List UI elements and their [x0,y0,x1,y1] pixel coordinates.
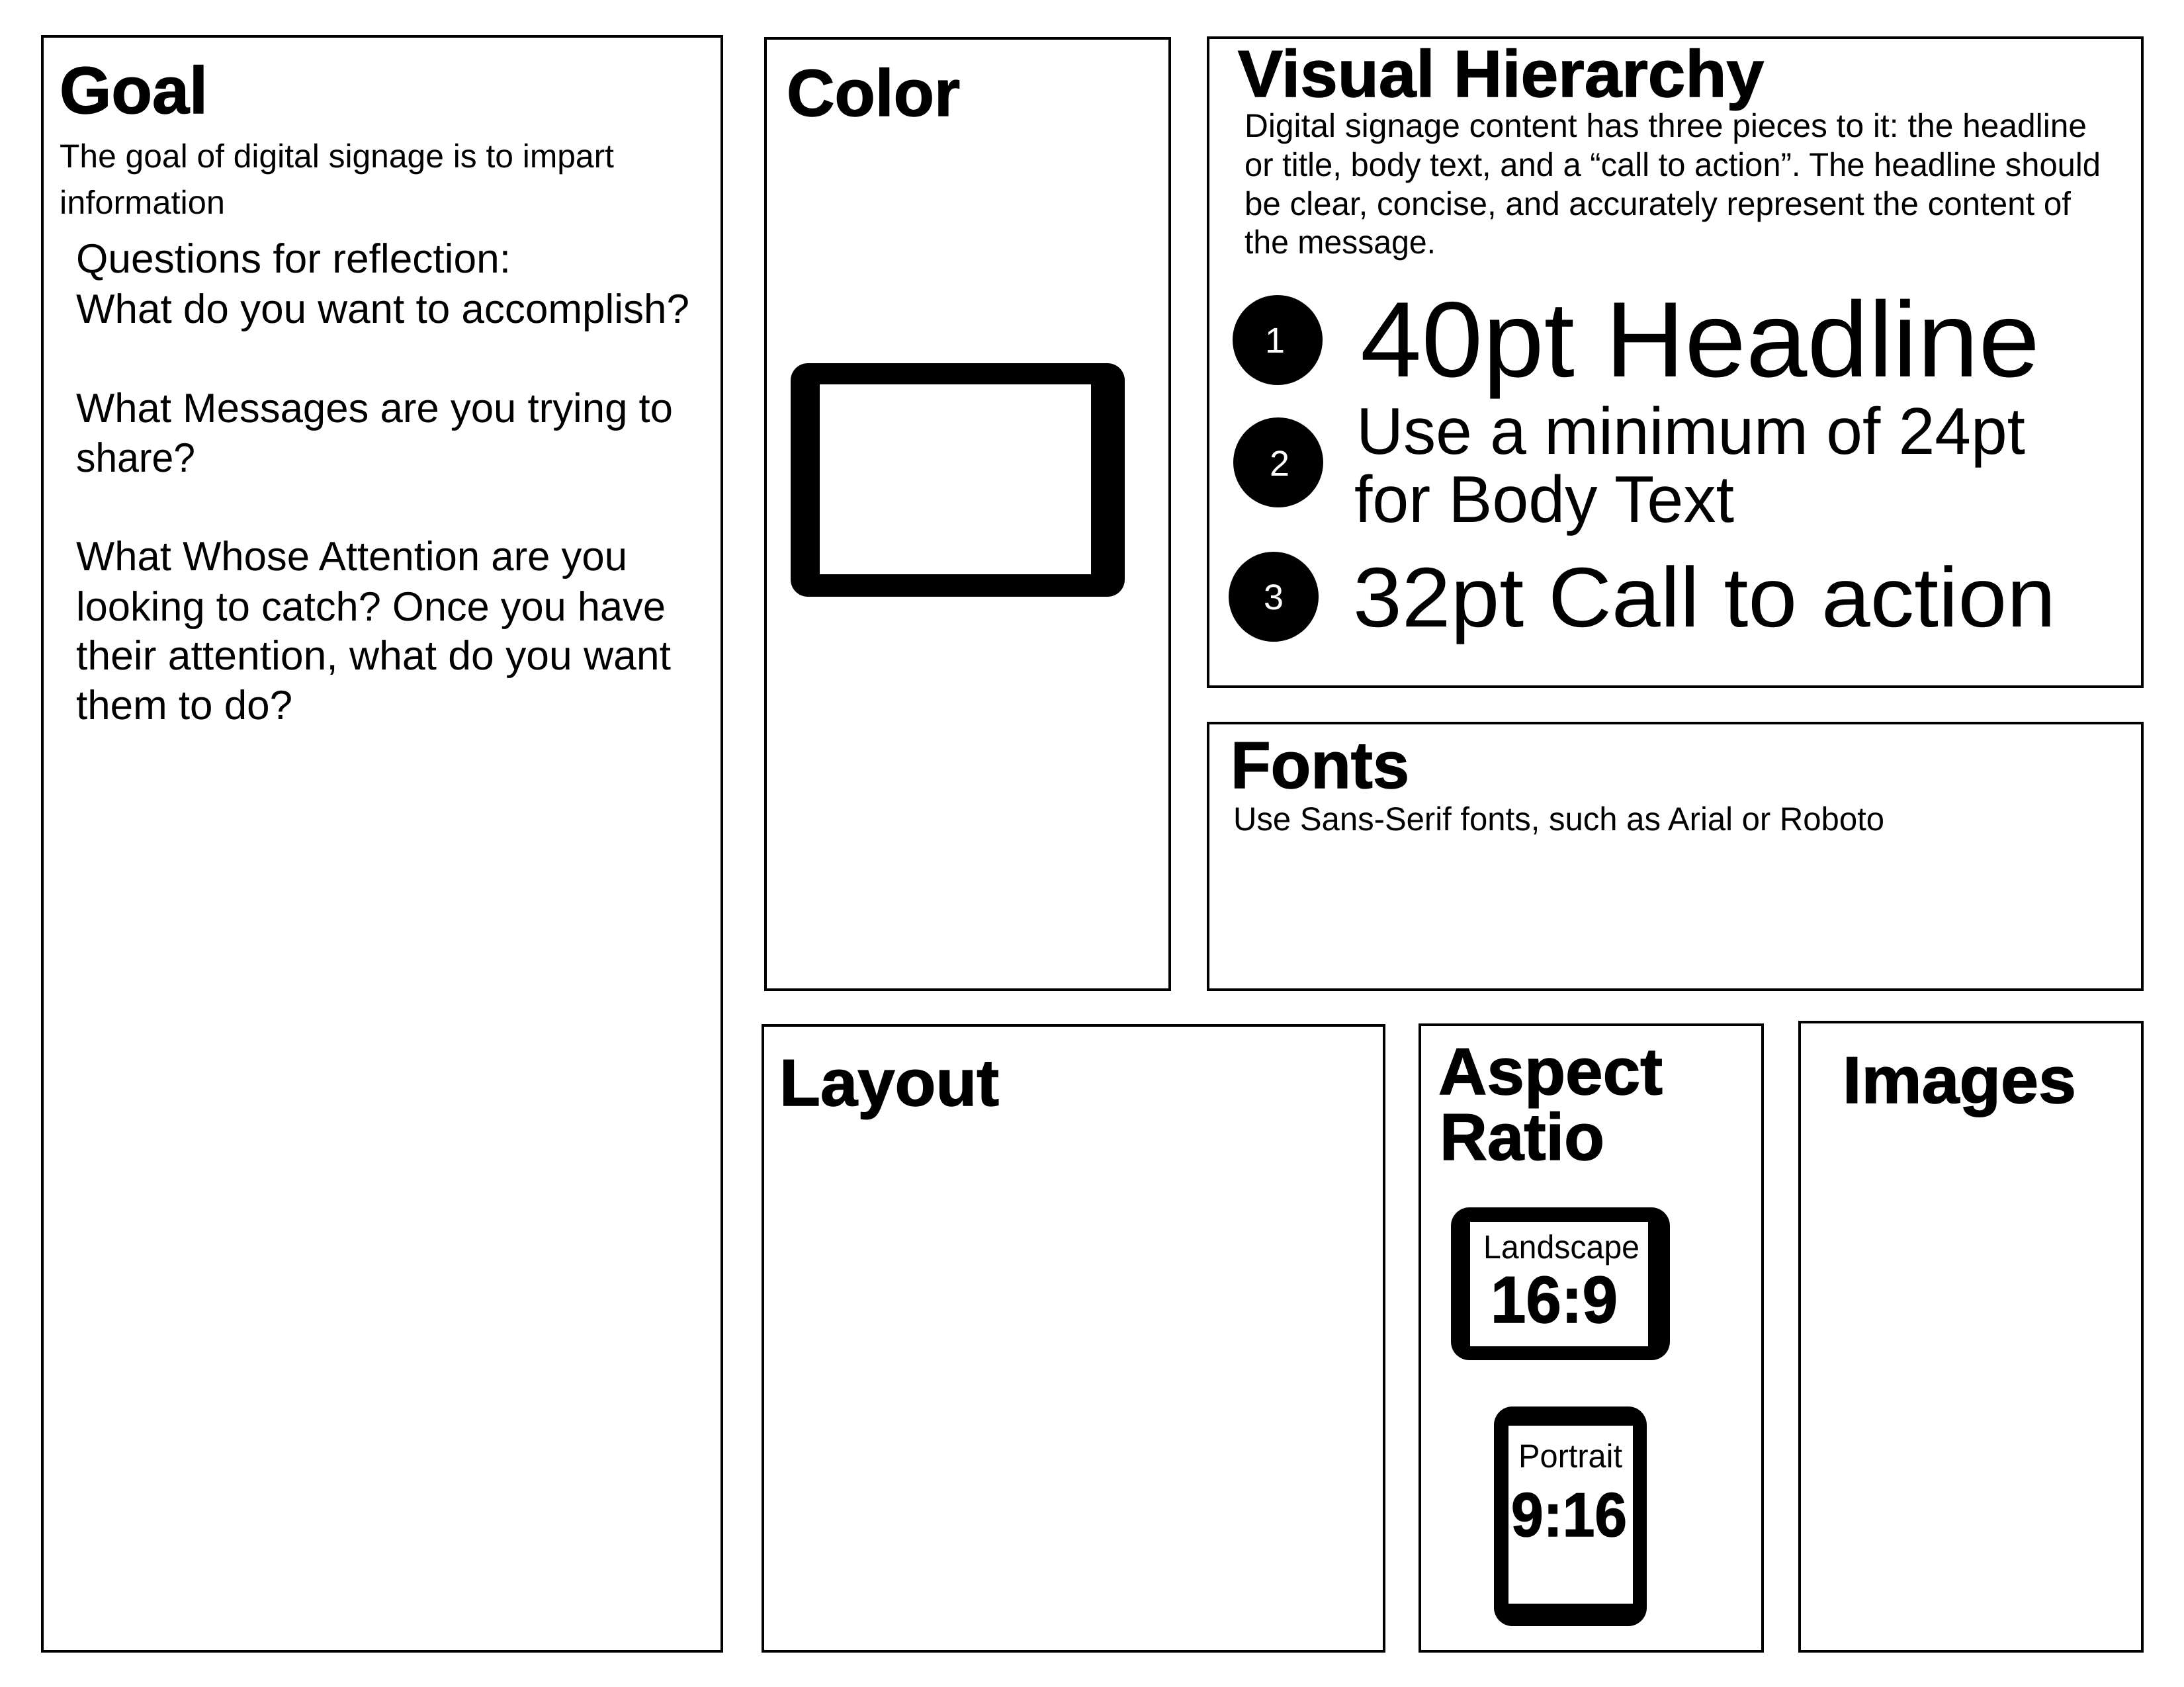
icon: landscape device: 16:9 [1491,1263,1618,1337]
text block: questions for reflection: What Whose Attention are you [76,534,627,580]
icon: portrait device: 9:16 [1511,1480,1627,1549]
text block: questions for reflection [76,236,689,728]
text block: hierarchy description: be clear, concise, and accurately represent the content of [1245,185,2071,222]
heading: color: Color [787,56,960,130]
icon: landscape device: Landscape [1483,1229,1639,1266]
number badge 1: 1 [1265,321,1285,361]
panel: color [765,38,1170,990]
example: call to action: 32pt Call to action [1353,550,2056,645]
panel: aspect ratio [1420,1025,1763,1651]
heading: layout: Layout [779,1046,999,1120]
panel: visual hierarchy [1208,37,2142,687]
text block: questions for reflection: their attention, what do you want [76,633,671,679]
text block: goal statement [60,138,614,221]
icon: landscape screen [791,363,1125,597]
text block: hierarchy description: Digital signage content has three pieces to it: the headline [1245,107,2087,144]
heading: aspect ratio: Aspect [1438,1035,1663,1109]
text block: questions for reflection: them to do? [76,683,292,728]
text block: hierarchy description: or title, body text, and a “call to action”. The headline should [1245,146,2101,183]
heading: images: Images [1843,1043,2076,1117]
example: body text: for Body Text [1354,462,1734,537]
text block: goal statement: The goal of digital signage is to impart [60,138,614,175]
panel: layout [763,1025,1384,1651]
text block: hierarchy description: the message. [1245,224,1436,261]
panel: fonts [1208,723,2142,990]
icon: portrait device [1494,1406,1647,1626]
text block: questions for reflection: What Messages are you trying to [76,386,673,431]
text block: hierarchy description [1245,107,2101,261]
number badge 1 [1233,295,1323,385]
example: headline: 40pt Headline [1360,280,2040,400]
heading: goal: Goal [60,54,208,128]
panel: goal [42,36,722,1651]
text block: questions for reflection: What do you want to accomplish? [76,286,689,332]
number badge 3 [1229,552,1319,642]
icon: portrait device: Portrait [1518,1438,1622,1475]
example: body text [1354,394,2025,537]
text block: questions for reflection: Questions for reflection: [76,236,511,282]
text block: questions for reflection: looking to catch? Once you have [76,584,666,630]
text block: goal statement: information [60,184,225,221]
number badge 2: 2 [1270,444,1289,484]
panel: images [1800,1022,2142,1651]
heading: fonts: Fonts [1231,728,1409,802]
number badge 3: 3 [1264,578,1284,617]
text block: font advice: Use Sans-Serif fonts, such as Arial or Roboto [1233,800,1884,838]
heading: aspect ratio [1438,1035,1663,1174]
example: body text: Use a minimum of 24pt [1356,394,2025,468]
heading: visual hierarchy: Visual Hierarchy [1238,37,1764,111]
text block: questions for reflection: share? [76,435,195,481]
icon: landscape device [1451,1207,1670,1360]
number badge 2 [1233,417,1323,507]
heading: aspect ratio: Ratio [1440,1100,1604,1174]
